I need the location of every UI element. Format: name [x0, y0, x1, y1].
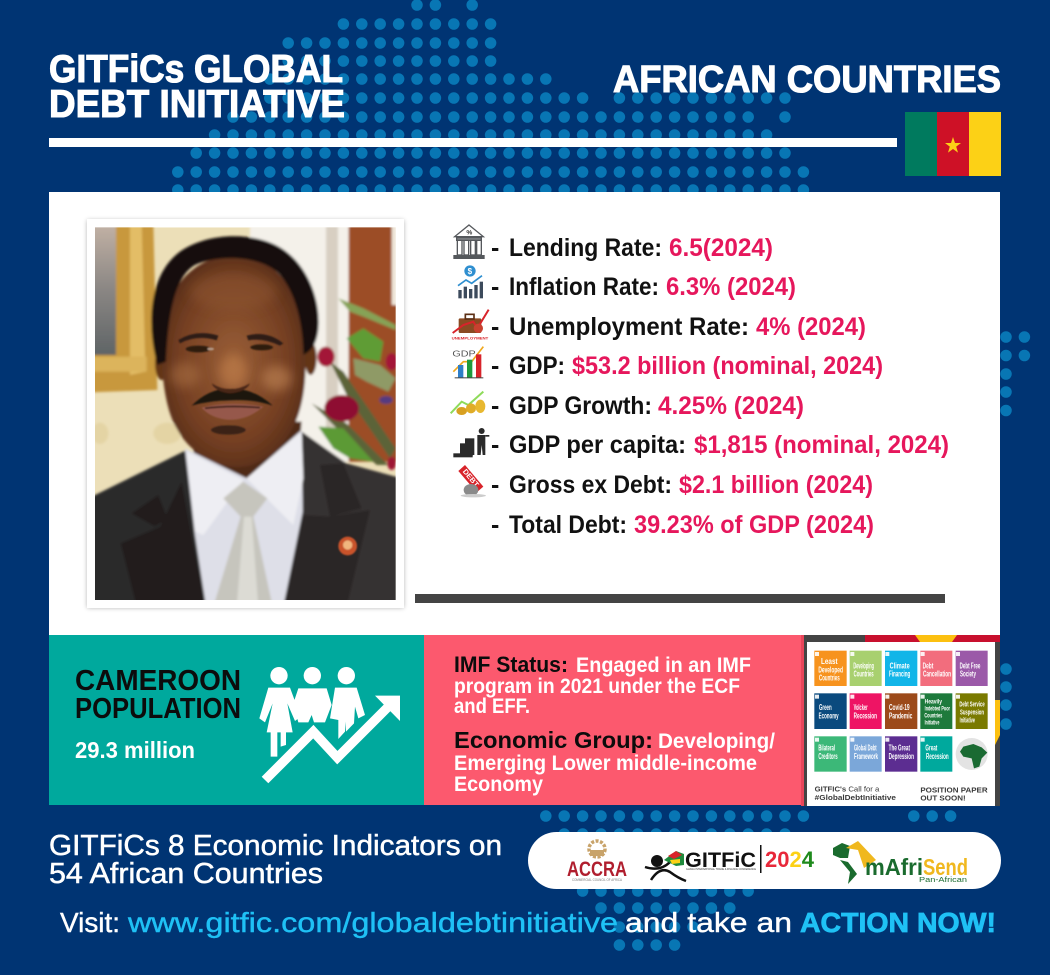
row: gross external debt: $2.1 billion (2024)	[679, 471, 873, 499]
caption: position paper out soon	[920, 785, 988, 802]
photo: portrait in white frame	[87, 219, 404, 608]
tiles: row one: Debt	[923, 661, 934, 670]
ears	[154, 357, 165, 382]
title: GITFiCs Global Debt Initiative: DEBT INITIATIVE	[49, 83, 345, 126]
row: GDP per capita: GDP per capita:	[509, 431, 686, 459]
text: economic group: Developing/	[658, 730, 775, 753]
tiles: row two: Volcker	[854, 703, 868, 712]
logo: Accra Chamber: ACCRA	[567, 858, 627, 881]
row: gross external debt: Gross ex Debt:	[509, 471, 672, 499]
icon: bank	[454, 225, 484, 258]
icons: indicator pictograms	[451, 225, 489, 497]
caption: call for global debt initiative	[815, 784, 896, 802]
heading: Cameroon population: POPULATION	[75, 693, 241, 725]
title: GITFiCs Global Debt Initiative	[49, 48, 345, 126]
tiles: row two: Pandemic	[889, 711, 913, 720]
text: IMF status: and EFF.	[454, 695, 530, 718]
caption: call for global debt initiative: #GlobalDebtInitiative	[815, 793, 896, 802]
tiles: row two	[814, 693, 988, 729]
call to action: www.gitfic.com/globaldebtinitiative	[127, 907, 618, 938]
logo: mAfriSend	[833, 841, 968, 884]
row: lending rate: 6.5(2024)	[669, 234, 773, 262]
icon: GDP growth coins	[451, 392, 485, 415]
row: lending rate: -	[491, 234, 499, 262]
heading: Cameroon population	[75, 665, 241, 725]
tiles: row one: Climate	[890, 661, 910, 670]
call to action: and take an	[625, 907, 792, 938]
icon: inflation chart	[458, 265, 483, 298]
eyes	[186, 346, 211, 352]
tiles: row two: Countries	[924, 713, 943, 720]
icon: inflation chart: $	[468, 267, 473, 276]
icon: debt burden	[458, 465, 486, 497]
row: gross external debt	[491, 471, 873, 499]
row: GDP growth	[491, 392, 804, 420]
tiles: row two: Green	[819, 703, 832, 712]
tiles: row one: Developed	[818, 665, 843, 674]
hair	[151, 236, 319, 365]
logo: Accra Chamber: COMMERCIAL COUNCIL OF AFRICA	[572, 877, 622, 882]
panel: IMF status and economic group	[424, 635, 801, 805]
lips	[202, 404, 263, 420]
tiles: row three	[814, 736, 952, 772]
logo: GITFIC 2024: 2024	[765, 847, 815, 872]
tiles: row one: Cancellation	[923, 670, 951, 679]
tiles: row two: Initiative	[960, 718, 975, 725]
tie	[213, 482, 273, 607]
nose	[212, 383, 250, 393]
tiles: row two: Heavily	[925, 698, 942, 705]
tiles: row one: Financing	[889, 670, 910, 679]
tiles: row one: Society	[960, 670, 976, 679]
panel: population	[49, 635, 424, 805]
text: economic group: Economy	[454, 773, 543, 796]
row: total debt	[491, 511, 874, 539]
tiles: row one: Developing	[853, 661, 874, 670]
row: lending rate: Lending Rate:	[509, 234, 662, 262]
row: unemployment rate: -	[491, 313, 499, 341]
tile index markers	[815, 652, 960, 742]
row: gross external debt: -	[491, 471, 499, 499]
row: GDP: $53.2 billion (nominal, 2024)	[572, 352, 883, 380]
caption: call for global debt initiative: GITFIC's Call for a	[815, 784, 880, 793]
icon: bank: %	[466, 229, 472, 236]
suit left	[88, 450, 207, 607]
tiles: row two: Debt Service	[959, 702, 985, 709]
row: total debt: 39.23% of GDP (2024)	[634, 511, 874, 539]
tiles: row one: Countries	[854, 670, 874, 679]
tiles: row three: Creditors	[818, 752, 838, 761]
lapel pin	[338, 537, 357, 555]
row: total debt: -	[491, 511, 499, 539]
suit right	[286, 431, 396, 600]
icon: unemployment briefcase	[452, 310, 489, 341]
tiles: row one: Countries	[819, 674, 840, 683]
row: inflation rate	[491, 273, 796, 301]
logo: GITFIC 2024	[645, 845, 815, 881]
row: GDP: GDP:	[509, 352, 565, 380]
tiles: row one: Least	[821, 657, 838, 666]
tiles: row two: Suspension	[960, 710, 984, 717]
row: GDP growth: 4.25% (2024)	[658, 392, 804, 420]
logo: mAfriSend: Pan-African	[919, 877, 967, 884]
call to action: ACTION NOW!	[800, 907, 996, 938]
icon: Africa globe	[956, 738, 988, 770]
text: IMF status: IMF Status:	[454, 652, 568, 677]
row: inflation rate: Inflation Rate:	[509, 273, 659, 301]
logo: Accra Chamber	[567, 841, 627, 882]
lapels	[134, 498, 166, 524]
goatee	[211, 425, 246, 435]
panel: main white card	[49, 192, 1000, 635]
icon: per capita man on coins	[453, 428, 489, 457]
header rule	[49, 138, 897, 147]
eyebrows	[178, 333, 218, 343]
heading: Cameroon population: CAMEROON	[75, 665, 241, 697]
title: GITFiCs Global Debt Initiative: GITFiCs GLOBAL	[49, 48, 343, 91]
tiles: row one	[814, 651, 988, 686]
row: inflation rate: -	[491, 273, 499, 301]
face	[162, 256, 306, 467]
text: economic group: Economic Group:	[454, 727, 653, 753]
text: IMF status: program in 2021 under the ECF	[454, 675, 740, 698]
divider bar	[415, 594, 945, 603]
flowers	[312, 298, 398, 470]
tiles: row two: Economy	[819, 711, 839, 720]
tiles: row three: The Great	[889, 744, 910, 753]
row: unemployment rate: 4% (2024)	[756, 313, 866, 341]
tiles: row two: Covid-19	[889, 703, 910, 712]
row: inflation rate: 6.3% (2024)	[666, 273, 796, 301]
panel: partner logos	[528, 832, 1001, 889]
text: economic group: Emerging Lower middle-income	[454, 752, 757, 775]
tiles: row three: Recession	[926, 752, 949, 761]
text: IMF status	[454, 652, 751, 718]
population value: 29.3 million	[75, 737, 195, 763]
icon: Cameroon flag	[905, 112, 1001, 176]
tiles: row three: Global Debt	[854, 744, 877, 753]
tiles: row three: Depression	[889, 752, 914, 761]
facial highlights	[191, 274, 276, 302]
text: economic group	[454, 727, 775, 796]
list: economic indicators	[491, 234, 949, 539]
caption: position paper out soon: POSITION PAPER	[920, 785, 988, 794]
tiles: row two: Initiative	[925, 720, 940, 727]
row: GDP per capita: -	[491, 431, 499, 459]
tiles: row three: Bilateral	[818, 744, 835, 753]
text: IMF status: Engaged in an IMF	[576, 654, 751, 677]
row: unemployment rate	[491, 313, 866, 341]
icon: GDP bars	[452, 347, 483, 378]
dotted world map background	[178, 5, 1025, 945]
heading: African Countries: AFRICAN COUNTRIES	[613, 59, 1001, 101]
row: unemployment rate: Unemployment Rate:	[509, 313, 749, 341]
row: GDP per capita	[491, 431, 949, 459]
moustache	[192, 389, 273, 406]
caption: position paper out soon: OUT SOON!	[920, 793, 966, 802]
neck	[188, 422, 302, 478]
tiles: row two: Recession	[854, 711, 877, 720]
logo: mAfriSend: Send	[923, 854, 968, 880]
row: GDP growth: -	[491, 392, 499, 420]
row: GDP: -	[491, 352, 499, 380]
text: GITFiCs economic indicators	[49, 830, 502, 890]
text: GITFiCs economic indicators: 54 African Countries	[49, 858, 323, 890]
text: GITFiCs economic indicators: GITFiCs 8 Economic Indicators on	[49, 830, 502, 862]
row: GDP growth: GDP Growth:	[509, 392, 652, 420]
row: total debt: Total Debt:	[509, 511, 627, 539]
icon: people and rising arrow	[259, 667, 400, 780]
call to action	[60, 907, 996, 938]
panel: position paper thumbnail	[801, 635, 1000, 806]
icon: GDP bars: GDP	[452, 349, 476, 359]
icon: debt burden: DEBT	[461, 467, 481, 489]
logo: GITFIC 2024: GITFiC	[685, 849, 756, 872]
tiles: row three: Great	[925, 744, 938, 753]
row: lending rate	[491, 234, 773, 262]
logo: mAfriSend: mAfri	[865, 854, 923, 880]
row: GDP per capita: $1,815 (nominal, 2024)	[694, 431, 949, 459]
tiles: row three: Framework	[854, 752, 878, 761]
logo: GITFIC 2024: GHANA INTERNATIONAL TRADE & FINANCE CONFERENCE	[686, 867, 756, 871]
call to action: Visit:	[60, 907, 120, 938]
shirt	[185, 430, 303, 607]
icon: unemployment briefcase: UNEMPLOYMENT	[452, 337, 488, 341]
tiles: row two: Indebted Poor	[925, 706, 950, 713]
tiles: row one: Debt Free	[960, 661, 981, 670]
